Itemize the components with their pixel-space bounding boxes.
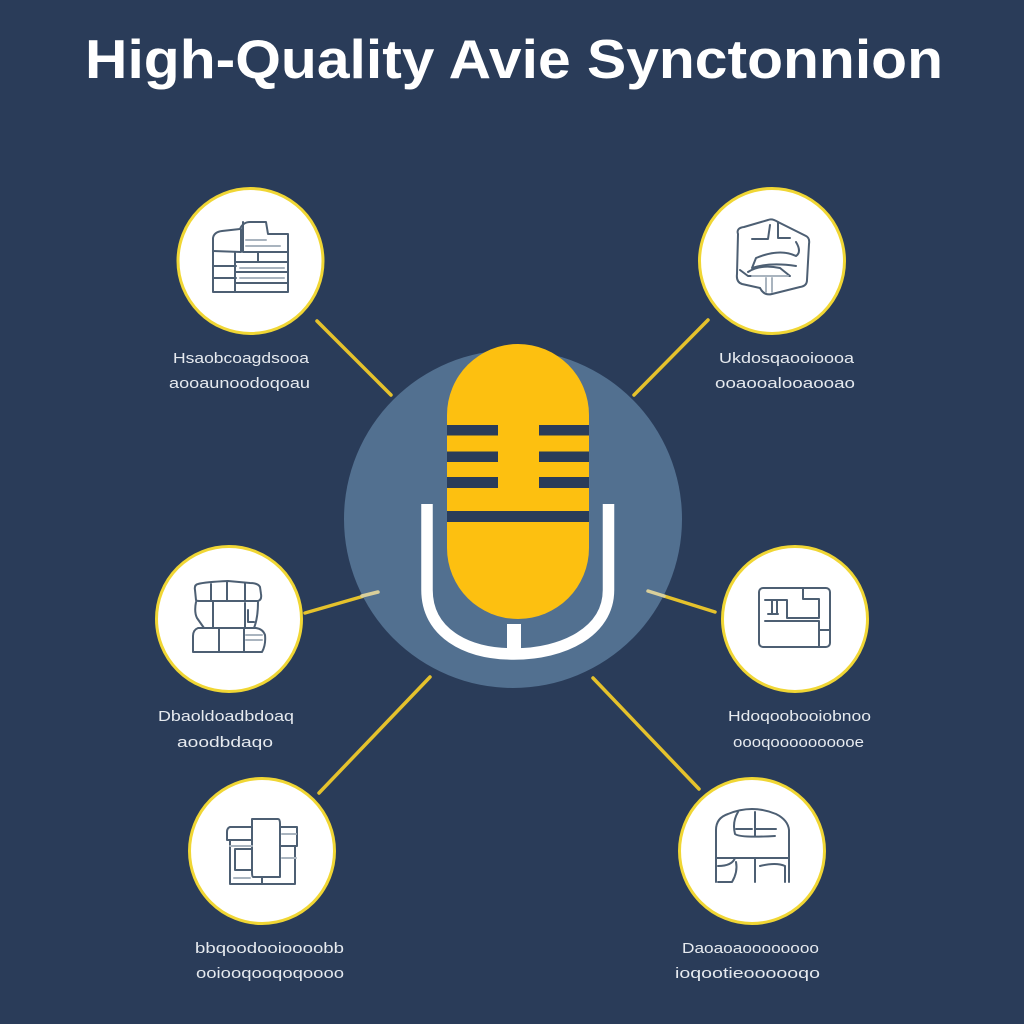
central microphone emblem xyxy=(344,344,682,688)
icon: floor plan xyxy=(759,588,830,647)
connector tips over backdrop xyxy=(362,591,664,596)
connector lines xyxy=(305,320,715,793)
icon: open box xyxy=(737,219,809,294)
microphone head xyxy=(447,344,589,619)
icon: document stack xyxy=(213,222,288,292)
label: Hsaobcoagdsooa xyxy=(173,350,310,367)
icon circle xyxy=(700,188,844,334)
label: ooaooalooaooao xyxy=(715,375,855,392)
label: aooaunoodoqoau xyxy=(169,375,310,392)
icon circle xyxy=(722,546,868,692)
label: ioqootieoooooqo xyxy=(675,965,820,982)
label xyxy=(169,350,310,392)
label: oooqoooooooooe xyxy=(733,734,864,751)
icon circle xyxy=(190,778,334,924)
feature: top left xyxy=(169,188,323,392)
label xyxy=(195,940,344,982)
label: Daoaoaoooooooo xyxy=(682,940,819,957)
feature: middle left xyxy=(156,546,302,751)
microphone grille slots xyxy=(447,425,589,522)
microphone stand xyxy=(427,504,608,654)
label xyxy=(715,350,855,392)
feature: top right xyxy=(700,188,855,392)
icon: block grid xyxy=(193,581,265,652)
label xyxy=(675,940,820,982)
icon: arched cabinet xyxy=(716,809,789,882)
feature: middle right xyxy=(722,546,871,751)
label xyxy=(158,708,294,751)
backdrop circle xyxy=(344,350,682,688)
icon circle xyxy=(680,778,824,924)
icon circle xyxy=(178,188,323,334)
label: Hdoqoobooiobnoo xyxy=(728,708,871,725)
label: ooiooqooqoqoooo xyxy=(196,965,344,982)
icon circle xyxy=(156,546,302,692)
feature: bottom left xyxy=(190,778,344,982)
feature: bottom right xyxy=(675,778,824,982)
label xyxy=(728,708,871,751)
title: High-Quality Avie Synctonnion xyxy=(85,28,943,90)
label: Ukdosqaooioooa xyxy=(719,350,855,367)
label: Dbaoldoadbdoaq xyxy=(158,708,294,725)
icon: binder stack xyxy=(227,819,297,884)
label: aoodbdaqo xyxy=(177,734,273,751)
label: bbqoodooioooobb xyxy=(195,940,344,957)
